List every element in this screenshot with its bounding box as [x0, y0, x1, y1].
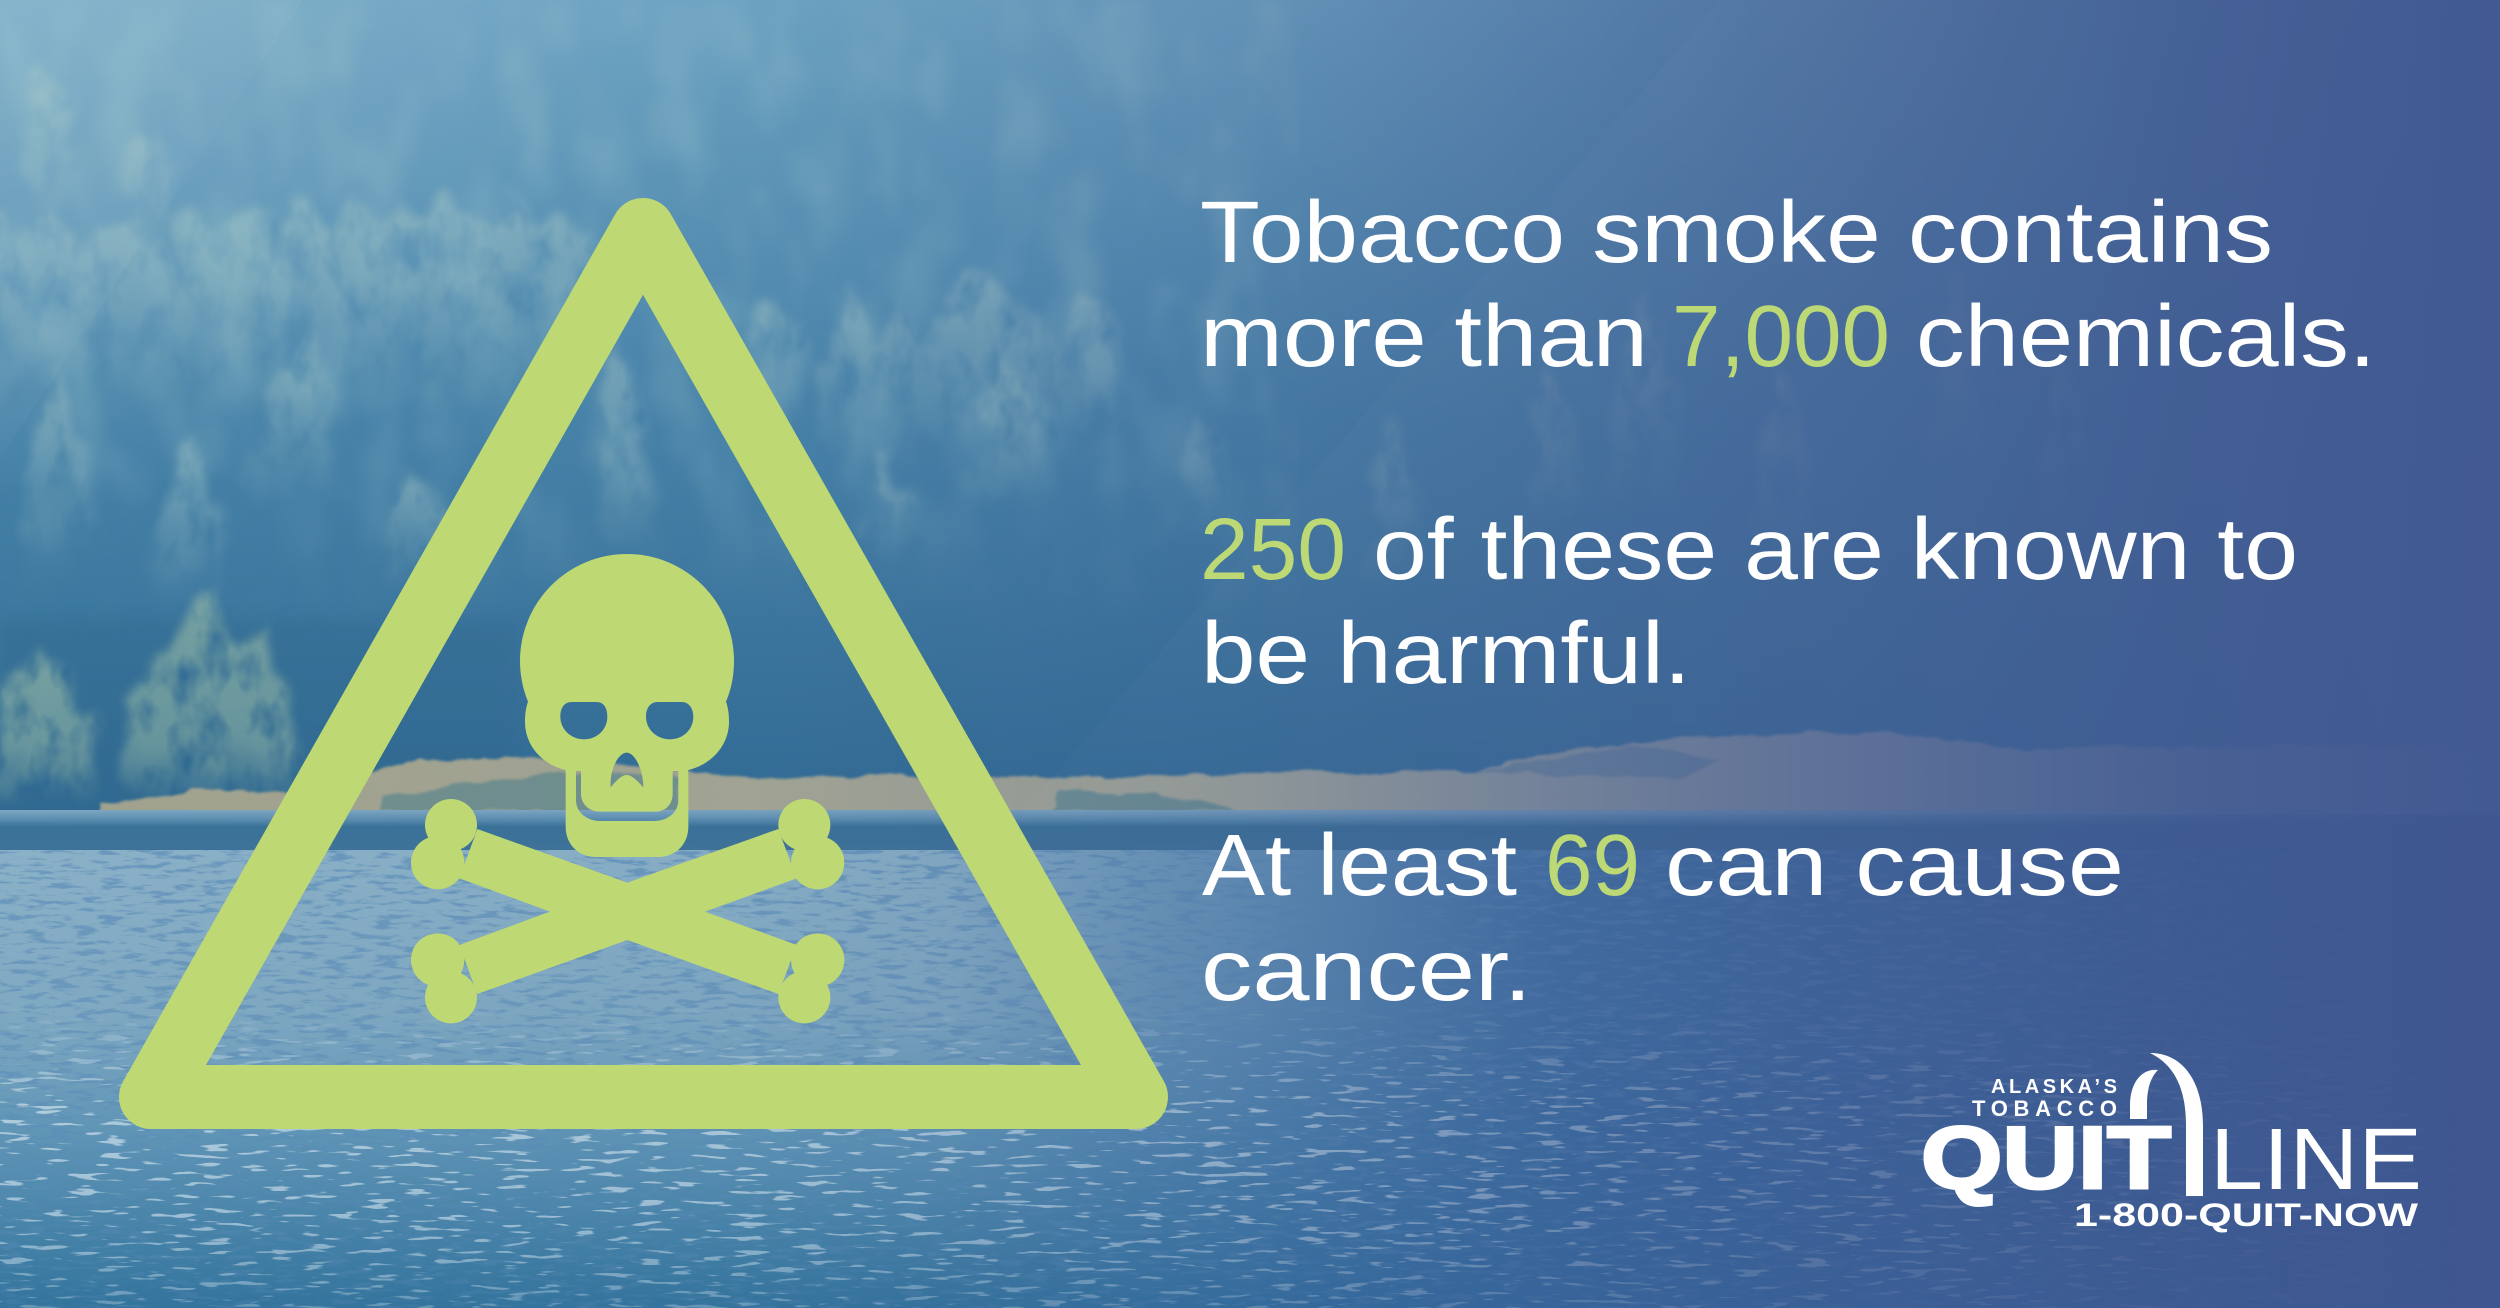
text block: 69 cause cancer: At least	[1202, 817, 1517, 914]
skull and crossbones	[411, 554, 844, 1023]
text block: 7,000 chemicals: more than	[1200, 288, 1648, 385]
logo: Alaska's Tobacco Quit Line: TOBACCO	[1972, 1096, 2117, 1121]
text block: 69 cause cancer	[1201, 817, 2124, 1019]
logo: Alaska's Tobacco Quit Line	[1921, 1053, 2422, 1233]
text block: 7,000 chemicals: chemicals.	[1916, 288, 2376, 385]
text block: 250 harmful	[1200, 501, 2298, 702]
text block: 250 harmful: 250	[1200, 501, 1346, 598]
icon: warning triangle with skull and crossbones	[151, 230, 1136, 1097]
text block: 7,000 chemicals	[1200, 184, 2376, 385]
text block: 69 cause cancer: 69	[1545, 817, 1640, 914]
text block: 250 harmful: be harmful.	[1201, 605, 1691, 702]
logo: Alaska's Tobacco Quit Line: 1-800-QUIT-NOW	[2074, 1197, 2419, 1233]
skull	[520, 554, 734, 857]
logo: Alaska's Tobacco Quit Line: LINE	[2210, 1111, 2422, 1208]
text block: 7,000 chemicals: Tobacco smoke contains	[1200, 184, 2273, 281]
text block: 7,000 chemicals: 7,000	[1672, 288, 1890, 385]
text block: 69 cause cancer: cancer.	[1201, 922, 1532, 1019]
warning triangle outline	[151, 230, 1136, 1097]
logo: Alaska's Tobacco Quit Line: ALASKA’S	[1991, 1076, 2117, 1098]
text block: 250 harmful: of these are known to	[1373, 501, 2298, 598]
logo: Alaska's Tobacco Quit Line: QUIT	[1921, 1108, 2171, 1207]
crossbones	[411, 799, 844, 1023]
text block: 69 cause cancer: can cause	[1665, 817, 2124, 914]
